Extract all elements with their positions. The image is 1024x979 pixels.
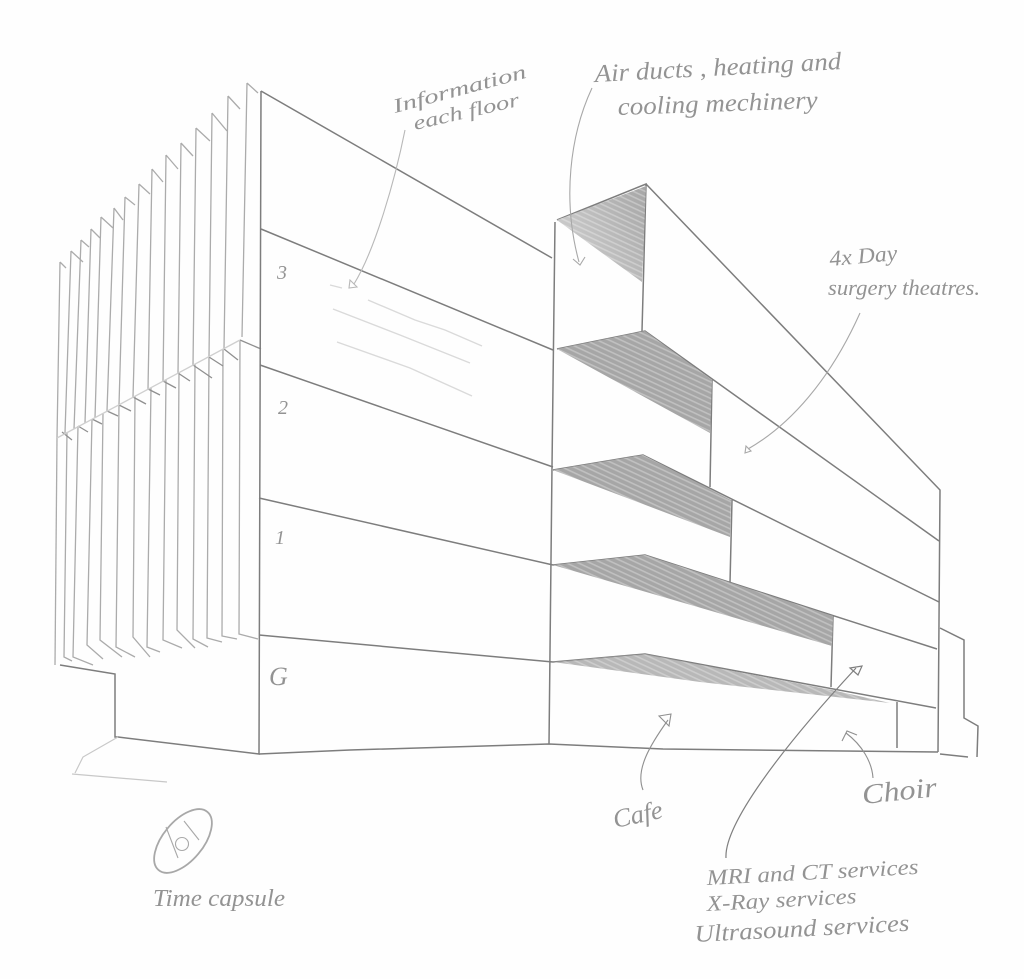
main building outline — [60, 91, 978, 757]
label: cafe: Cafe — [610, 795, 665, 834]
label: information each floor — [389, 61, 529, 135]
upper right wing — [557, 184, 940, 752]
right annex — [940, 628, 978, 757]
lower fins — [55, 438, 57, 665]
label: air ducts: cooling mechinery — [617, 87, 819, 121]
base and corner — [60, 91, 261, 754]
pencil marks: information each floor — [330, 285, 482, 396]
label: choir: Choir — [860, 772, 938, 811]
label: day surgery theatres — [828, 240, 980, 300]
arrow: day surgery — [745, 313, 860, 453]
central vertical — [549, 222, 555, 744]
label: air ducts: Air ducts , heating and — [592, 48, 843, 88]
break ticks — [62, 340, 261, 440]
label: information each floor: each floor — [411, 89, 522, 135]
shaded floor soffits — [553, 186, 890, 703]
left wing roof and floor lines — [259, 91, 553, 662]
floor label 3: 3 — [276, 262, 287, 284]
arrow: air ducts — [570, 88, 592, 265]
right wing floor lines — [553, 331, 939, 708]
label: information each floor: Information — [389, 61, 529, 118]
floor label 2: 2 — [278, 397, 288, 419]
arrow: information — [349, 130, 405, 288]
right wing verticals — [710, 380, 897, 748]
upper fins — [57, 262, 66, 438]
floor numbers — [269, 262, 288, 691]
label: day surgery theatres: 4x Day — [828, 240, 898, 271]
icon: time capsule — [143, 799, 223, 883]
left facade: vertical fins — [55, 83, 261, 665]
floor label G: G — [269, 662, 288, 691]
ground lines — [72, 737, 167, 782]
label: air ducts — [592, 48, 842, 121]
floor label 1: 1 — [275, 527, 285, 549]
building bottom edge — [259, 744, 938, 754]
label: time capsule: Time capsule — [153, 886, 285, 912]
label: services: X-Ray services — [705, 883, 857, 916]
arrow: MRI and CT — [726, 666, 862, 858]
label: services: MRI and CT services — [705, 854, 919, 890]
arrow: choir — [842, 731, 873, 778]
label: services — [694, 854, 919, 948]
arrow: cafe — [641, 714, 671, 790]
label: services: Ultrasound services — [694, 911, 910, 948]
label: day surgery theatres: surgery theatres. — [828, 275, 980, 300]
